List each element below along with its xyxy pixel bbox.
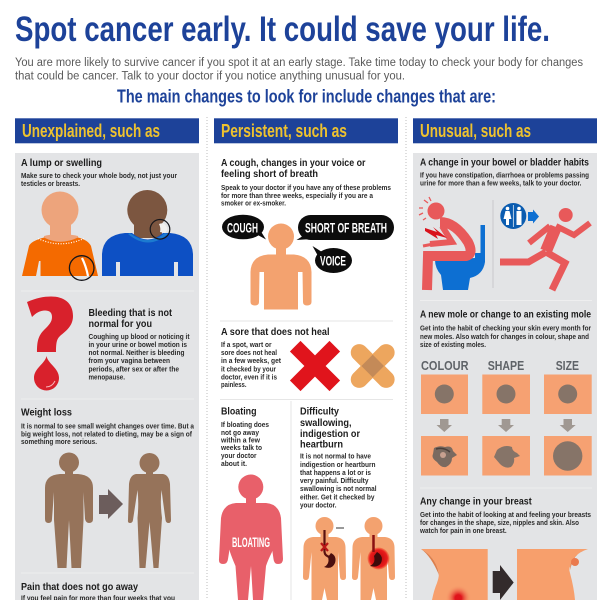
icon: toilet sign xyxy=(500,203,526,229)
icon: person with lump on neck xyxy=(102,190,193,276)
text: sore: doctor, even if it is xyxy=(221,372,277,382)
diagram: size change: SIZE xyxy=(556,359,579,373)
icon: person coughing xyxy=(250,224,312,310)
text: mole: size of existing moles. xyxy=(420,340,486,349)
intro text: You are more likely to survive cancer if you spot it at an early stage. Take time today to check your body for changes xyxy=(15,57,583,69)
heading: sore: A sore that does not heal xyxy=(221,327,330,338)
column header: unexplained: Unexplained, such as xyxy=(22,121,160,141)
text: bleeding: in your urine or bowel motion is xyxy=(88,340,187,349)
text: difficulty swallowing xyxy=(300,452,376,510)
text: bloating: about it. xyxy=(221,459,247,468)
text: difficulty swallowing: indigestion or heartburn xyxy=(300,460,376,469)
text: cough: for more than three weeks, especially if you are a xyxy=(221,191,374,200)
heading: lump: A lump or swelling xyxy=(21,158,102,169)
icon: thinner figure xyxy=(128,453,171,568)
heading: difficulty swallowing xyxy=(300,406,360,450)
text: bloating: weeks talk to xyxy=(220,443,262,452)
icon: swallowing figure xyxy=(303,517,346,600)
column header: persistent: Persistent, such as xyxy=(221,121,347,141)
text: bleeding: from your vagina between xyxy=(88,356,170,365)
text: difficulty swallowing: swallowing is not normal xyxy=(300,484,376,493)
icon: person on toilet xyxy=(419,197,485,290)
icon: breast with pain xyxy=(421,549,488,600)
arrow: to toilet xyxy=(528,210,539,224)
arrow: weight change xyxy=(99,489,123,519)
text: sore xyxy=(221,340,281,389)
heading: bleeding: normal for you xyxy=(88,319,152,330)
text: sore: it checked by your xyxy=(221,364,276,374)
text: lump xyxy=(21,171,177,188)
text: sore: If a spot, wart or xyxy=(221,340,272,349)
heading: pain: Pain that does not go away xyxy=(21,582,138,593)
heading: difficulty swallowing: swallowing, xyxy=(300,418,352,429)
column header: unusual xyxy=(413,118,597,143)
speech bubble: voice xyxy=(312,246,352,273)
text: bloating xyxy=(220,420,269,468)
text: weight loss: something more serious. xyxy=(21,437,97,446)
text: bloating: your doctor xyxy=(221,451,257,460)
text: bleeding xyxy=(88,332,190,382)
heading: bleeding xyxy=(88,308,173,330)
text: bloating: within a few xyxy=(220,436,260,444)
icon: sticking plaster xyxy=(334,327,412,405)
text: difficulty swallowing: very painful. Difficulty xyxy=(300,476,369,485)
text: weight loss xyxy=(21,422,195,446)
speech bubble: short of breath xyxy=(296,215,394,240)
text: difficulty swallowing: your doctor. xyxy=(300,500,336,510)
text: weight loss: It is normal to see small weight changes over time. But a xyxy=(21,422,195,430)
text: bloating: If bloating does xyxy=(221,420,269,429)
speech bubble: voice: VOICE xyxy=(320,252,346,268)
speech bubble: short of breath: SHORT OF BREATH xyxy=(305,220,387,236)
heading: difficulty swallowing: Difficulty xyxy=(300,406,339,418)
heading: cough xyxy=(221,158,366,180)
panel: unexplained xyxy=(15,118,199,600)
text: breast: watch for pain in one breast. xyxy=(419,526,507,535)
text: bowel or bladder xyxy=(420,170,589,188)
text: difficulty swallowing: either. Get it checked by xyxy=(300,492,375,502)
text: mole xyxy=(420,324,591,349)
text: cough xyxy=(221,183,391,208)
heading: difficulty swallowing: indigestion or xyxy=(300,429,360,440)
text: lump: testicles or breasts. xyxy=(21,179,80,188)
text: sore: in a few weeks, get xyxy=(221,356,281,365)
text: sore: painless. xyxy=(221,380,246,389)
text: lump: Make sure to check your whole body, not just your xyxy=(21,171,177,180)
heading: cough: A cough, changes in your voice or xyxy=(221,158,366,169)
text: cough: Speak to your doctor if you have any of these problems xyxy=(221,183,391,192)
diagram: size change xyxy=(544,359,592,476)
icon: heartburn figure xyxy=(352,517,395,600)
diagram: shape change: SHAPE xyxy=(488,359,524,373)
icon: bloated figure: BLOATING xyxy=(232,534,270,550)
panel: unusual xyxy=(413,118,597,600)
heading: difficulty swallowing: heartburn xyxy=(300,440,343,450)
panel: persistent xyxy=(214,118,412,600)
text: cough: smoker or ex-smoker. xyxy=(221,198,286,208)
heading: bleeding: Bleeding that is not xyxy=(88,308,173,319)
text: bloating: not go away xyxy=(221,428,260,437)
heading: breast: Any change in your breast xyxy=(420,496,532,508)
column header: unusual: Unusual, such as xyxy=(420,121,531,141)
text: sore: sore does not heal xyxy=(221,348,277,357)
text: weight loss: big weight loss, not related to dieting, may be a sign of xyxy=(21,430,192,438)
arrow: breast change xyxy=(493,565,514,600)
speech bubble: cough: COUGH xyxy=(227,220,258,236)
icon: larger figure xyxy=(45,452,93,568)
text: difficulty swallowing: that happens a lot or is xyxy=(300,468,371,477)
text: difficulty swallowing: It is not normal to have xyxy=(300,452,371,460)
text: bleeding: not normal. Neither is bleeding xyxy=(88,348,185,357)
diagram: shape change xyxy=(482,359,530,476)
intro text xyxy=(15,57,583,82)
speech bubble: cough xyxy=(222,215,266,240)
text: bleeding: Coughing up blood or noticing it xyxy=(88,332,190,341)
heading: weight loss: Weight loss xyxy=(21,408,72,418)
subheading: The main changes to look for include changes that are: xyxy=(117,86,496,107)
diagram: colour change xyxy=(421,359,468,476)
icon: running person xyxy=(500,208,590,290)
intro text: that could be cancer. Talk to your doctor if you notice anything unusual for you. xyxy=(15,70,405,82)
heading: bloating: Bloating xyxy=(221,406,256,418)
heading: cough: feeling short of breath xyxy=(221,169,318,180)
text: breast xyxy=(419,510,591,535)
diagram: colour change: COLOUR xyxy=(421,359,468,373)
icon: breast with lump xyxy=(517,549,588,600)
icon: person with lump on chest xyxy=(22,192,98,280)
text: bleeding: menopause. xyxy=(88,372,125,382)
icon: red cross xyxy=(275,326,355,406)
text: bowel or bladder: urine for more than a few weeks, talk to your doctor. xyxy=(420,178,582,188)
icon: bloated figure xyxy=(219,474,283,600)
text: bleeding: periods, after sex or after the xyxy=(88,364,179,374)
icon: question mark and blood drop xyxy=(27,296,73,390)
